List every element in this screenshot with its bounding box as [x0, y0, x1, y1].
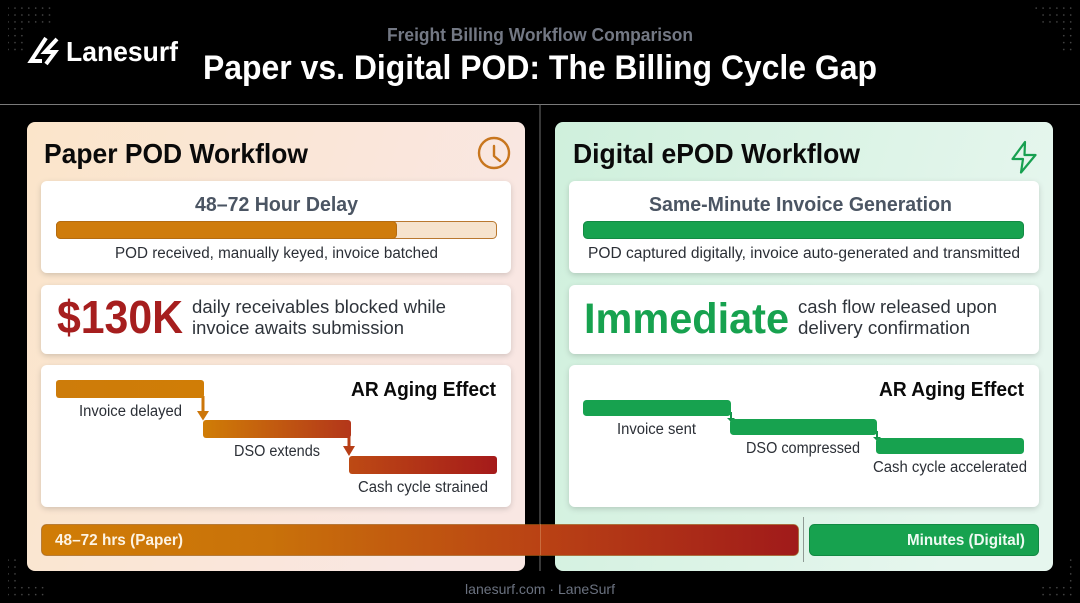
stat description: [192, 296, 446, 338]
invoice generation card: [569, 181, 1039, 273]
logo: Lanesurf: [31, 36, 179, 67]
panel: digital ePOD workflow: [555, 122, 1053, 571]
comparison bar: paper: [42, 524, 798, 556]
step 2 bar: [203, 420, 351, 438]
AR aging card: [41, 365, 511, 507]
waterfall steps: [56, 380, 497, 496]
cash flow card: [569, 285, 1039, 354]
waterfall steps: [583, 400, 1027, 476]
stat description: invoice awaits submission: [192, 317, 404, 338]
step labels: Cash cycle accelerated: [873, 459, 1027, 476]
card heading: Same-Minute Invoice Generation: [649, 194, 952, 216]
paper bar label: 48–72 hrs (Paper): [55, 532, 183, 549]
step 3 bar: [876, 438, 1024, 454]
receivables card: [41, 285, 511, 354]
stat: $130K: [57, 291, 183, 343]
step 1 bar: [583, 400, 731, 416]
arrow: step 2 to 3: [873, 431, 881, 441]
icon: clock: [479, 138, 509, 168]
step labels: Invoice delayed: [79, 403, 182, 420]
step labels: [617, 421, 1027, 476]
step labels: Cash cycle strained: [358, 479, 488, 496]
card heading: 48–72 Hour Delay: [195, 194, 359, 216]
step 1 bar: [56, 380, 204, 398]
card caption: POD captured digitally, invoice auto-generated and transmitted: [588, 245, 1020, 262]
digital bar label: Minutes (Digital): [907, 532, 1025, 549]
stat description: cash flow released upon: [798, 296, 997, 317]
progress bar: [584, 222, 1024, 238]
arrow: step 1 to 2: [197, 396, 209, 420]
card heading: AR Aging Effect: [879, 379, 1024, 401]
AR aging card: [569, 365, 1039, 507]
comparison bar: digital: [810, 524, 1038, 556]
subtitle: Freight Billing Workflow Comparison: [387, 25, 693, 45]
stat description: daily receivables blocked while: [192, 296, 446, 317]
panel heading: Paper POD Workflow: [44, 138, 308, 169]
arrow: step 1 to 2: [727, 412, 735, 422]
header rule and centre divider: [0, 104, 1080, 571]
stat description: [798, 296, 997, 338]
arrow: step 2 to 3: [343, 436, 355, 456]
step 2 bar: [730, 419, 877, 435]
comparison divider: [803, 517, 804, 562]
icon: lightning bolt: [1012, 142, 1036, 172]
step labels: Invoice sent: [617, 421, 697, 438]
logo wordmark: Lanesurf: [66, 36, 179, 67]
title: Paper vs. Digital POD: The Billing Cycle Gap: [203, 49, 877, 87]
stat: Immediate: [584, 295, 789, 343]
step labels: DSO extends: [234, 443, 320, 460]
icon: logo mark: [31, 38, 57, 64]
step labels: DSO compressed: [746, 440, 860, 457]
card heading: AR Aging Effect: [351, 379, 496, 401]
card caption: POD received, manually keyed, invoice batched: [115, 245, 438, 262]
panel background: [555, 122, 1053, 571]
step labels: [79, 403, 488, 496]
faint centre divider across bar: [540, 524, 541, 555]
panel: paper POD workflow: [27, 122, 525, 571]
step 3 bar: [349, 456, 497, 474]
delay card: [41, 181, 511, 273]
stat description: delivery confirmation: [798, 317, 970, 338]
panel heading: Digital ePOD Workflow: [573, 138, 860, 169]
panel background: [27, 122, 525, 571]
footer: lanesurf.com · LaneSurf: [465, 581, 615, 597]
progress bar: [56, 222, 496, 238]
